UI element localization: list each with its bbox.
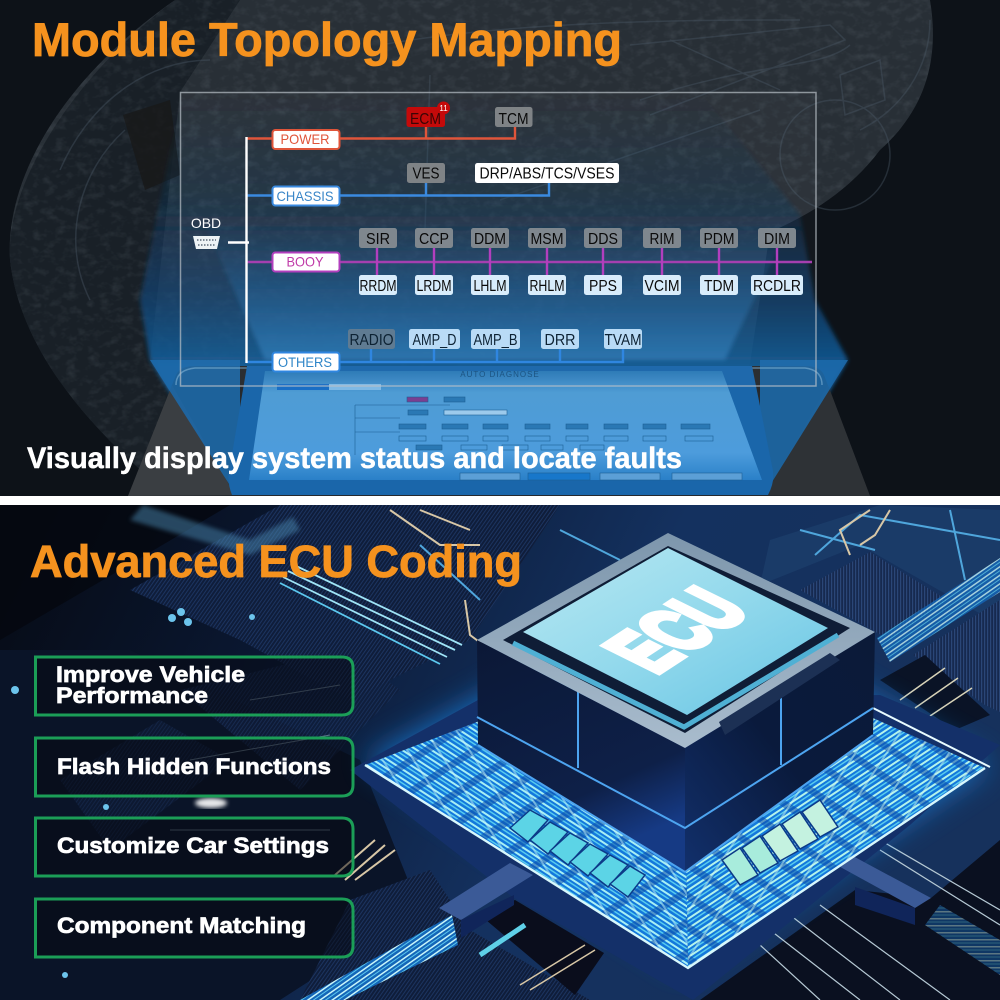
other modules row: AMP_D (412, 332, 456, 349)
VES module: VES (412, 166, 440, 182)
other modules row: DRR (544, 332, 576, 349)
other modules row (348, 329, 642, 349)
feature box: component matching: Component Matching (57, 913, 306, 938)
feature box: improve vehicle performance (36, 657, 353, 715)
ECU chip (477, 533, 875, 872)
feature box: improve vehicle performance: Performance (56, 683, 208, 708)
body modules upper row (359, 228, 796, 248)
chip light panel (523, 548, 828, 715)
feature box: flash hidden functions: Flash Hidden Functions (57, 754, 331, 779)
chip frame opening (503, 546, 850, 733)
diagnostic tablet (128, 360, 870, 496)
DRP/ABS/TCS/VSES module: DRP/ABS/TCS/VSES (480, 166, 614, 182)
body modules upper row: DDM (474, 231, 506, 248)
body modules lower row: LHLM (474, 278, 506, 295)
tablet screen mini topology (355, 397, 742, 480)
ECM module fault (406, 102, 450, 128)
OBD label and connector icon: OBD (191, 215, 221, 231)
body modules lower row: PPS (589, 278, 617, 295)
ECM module fault: 11 (439, 104, 448, 113)
body modules upper row: MSM (530, 231, 564, 248)
chip top frame (477, 533, 875, 748)
POWER node (272, 130, 340, 149)
lighter inner beam (218, 244, 776, 361)
TCM module: TCM (498, 111, 528, 128)
diagnostic tablet: AUTO DIAGNOSE (460, 370, 540, 379)
chip clips (719, 653, 840, 735)
other modules row: AMP_B (474, 332, 518, 349)
connector fins (510, 800, 838, 897)
feature box: customize car settings: Customize Car Settings (57, 833, 329, 858)
OBD trunk line (228, 137, 249, 363)
other modules row: RADIO (350, 332, 394, 349)
chip pin strip (513, 635, 838, 727)
body modules upper row: DIM (764, 231, 790, 248)
BOOY node (272, 252, 340, 272)
body modules upper row: RIM (650, 231, 674, 248)
title: module topology mapping: Module Topology Mapping (32, 13, 622, 66)
body modules lower row: RCDLR (753, 278, 801, 295)
body modules lower row: RRDM (360, 278, 396, 295)
OTHERS node: OTHERS (278, 354, 332, 370)
feature box: flash hidden functions (36, 738, 353, 796)
BOOY node: BOOY (286, 254, 324, 270)
body modules lower row: VCIM (644, 278, 680, 295)
substrate frame (350, 695, 1000, 1000)
glowing circuit substrate (365, 690, 990, 968)
ECU chip label: ECU (584, 577, 769, 684)
bus lines (246, 127, 812, 362)
chip right face (685, 632, 875, 872)
OBD label and connector icon (192, 218, 220, 249)
other modules row: TVAM (604, 332, 642, 349)
ECM module fault: ECM (410, 111, 441, 128)
glow around chip (356, 667, 998, 922)
body modules lower row (359, 275, 803, 295)
body modules lower row: LRDM (416, 278, 452, 295)
body modules lower row: RHLM (530, 278, 564, 295)
CHASSIS node: CHASSIS (276, 188, 334, 204)
caption: system status: Visually display system status and locate faults (27, 442, 682, 475)
panel: module topology mapping (0, 0, 1000, 496)
body modules upper row: PDM (704, 231, 734, 248)
POWER node: POWER (280, 131, 330, 147)
car x-ray background (10, 0, 933, 468)
feature box: component matching (36, 899, 353, 957)
feature box: improve vehicle performance: Improve Vehicle (56, 662, 245, 687)
topology frame (180, 92, 816, 386)
body modules lower row: TDM (704, 278, 734, 295)
panel: advanced ecu coding (0, 505, 1000, 1000)
body modules upper row: DDS (588, 231, 618, 248)
feature box: customize car settings (36, 818, 353, 876)
chip glowing seams (477, 692, 873, 872)
body modules upper row: CCP (419, 231, 449, 248)
title: advanced ecu coding: Advanced ECU Coding (30, 536, 522, 587)
blue projection beam (138, 146, 850, 395)
chip left face (477, 640, 685, 872)
circuit board background (0, 505, 1000, 1000)
body modules upper row: SIR (366, 231, 390, 248)
